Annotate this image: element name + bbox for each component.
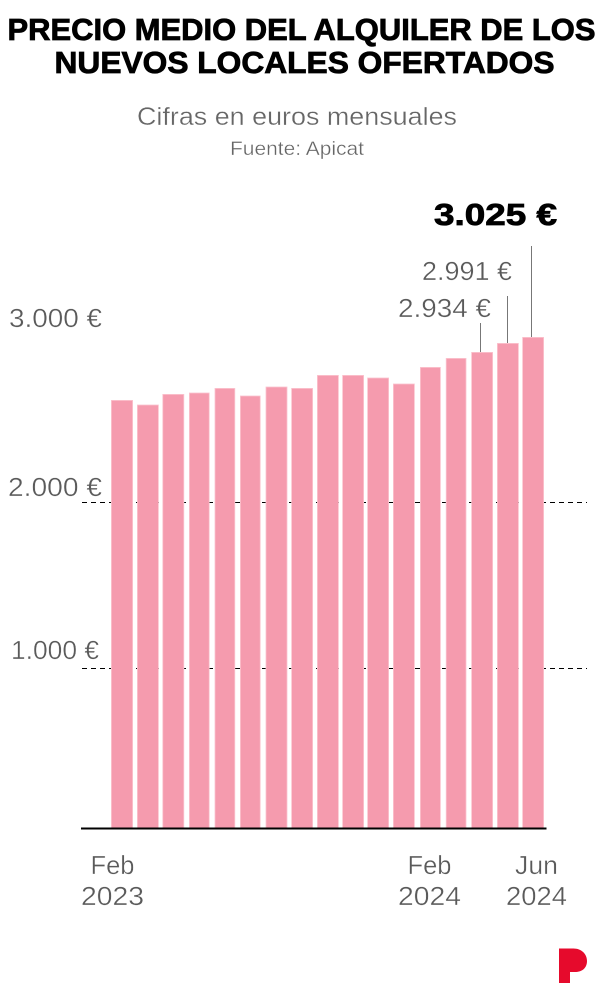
value label: 3.025 €: 3.025 € <box>434 197 557 232</box>
icon: publisher logo <box>559 948 587 983</box>
value label: 2.991 €: 2.991 € <box>422 256 513 286</box>
x label: Feb 2023: Feb <box>90 850 134 880</box>
x label: Feb 2023 <box>81 850 144 911</box>
value label: 2.934 €: 2.934 € <box>398 293 492 323</box>
bar chart <box>111 337 544 828</box>
x label: Jun 2024: 2024 <box>506 881 567 911</box>
title: NUEVOS LOCALES OFERTADOS <box>54 45 554 80</box>
gridlines <box>82 502 587 668</box>
subtitle: Cifras en euros mensuales <box>137 103 457 131</box>
x label: Jun 2024 <box>506 850 567 911</box>
x label: Feb 2024: Feb <box>408 850 452 880</box>
y axis labels: 1.000 € <box>11 635 100 665</box>
title <box>8 12 596 80</box>
x label: Feb 2024: 2024 <box>398 881 461 911</box>
y axis labels <box>8 303 103 665</box>
y axis labels: 3.000 € <box>9 303 103 333</box>
baseline axis <box>81 828 546 830</box>
leader lines <box>480 246 532 352</box>
y axis labels: 2.000 € <box>8 472 103 502</box>
x label: Feb 2023: 2023 <box>81 881 144 911</box>
title: PRECIO MEDIO DEL ALQUILER DE LOS <box>8 12 596 47</box>
source: Fuente: Apicat <box>230 139 365 160</box>
x label: Feb 2024 <box>398 850 461 911</box>
x label: Jun 2024: Jun <box>515 850 558 880</box>
